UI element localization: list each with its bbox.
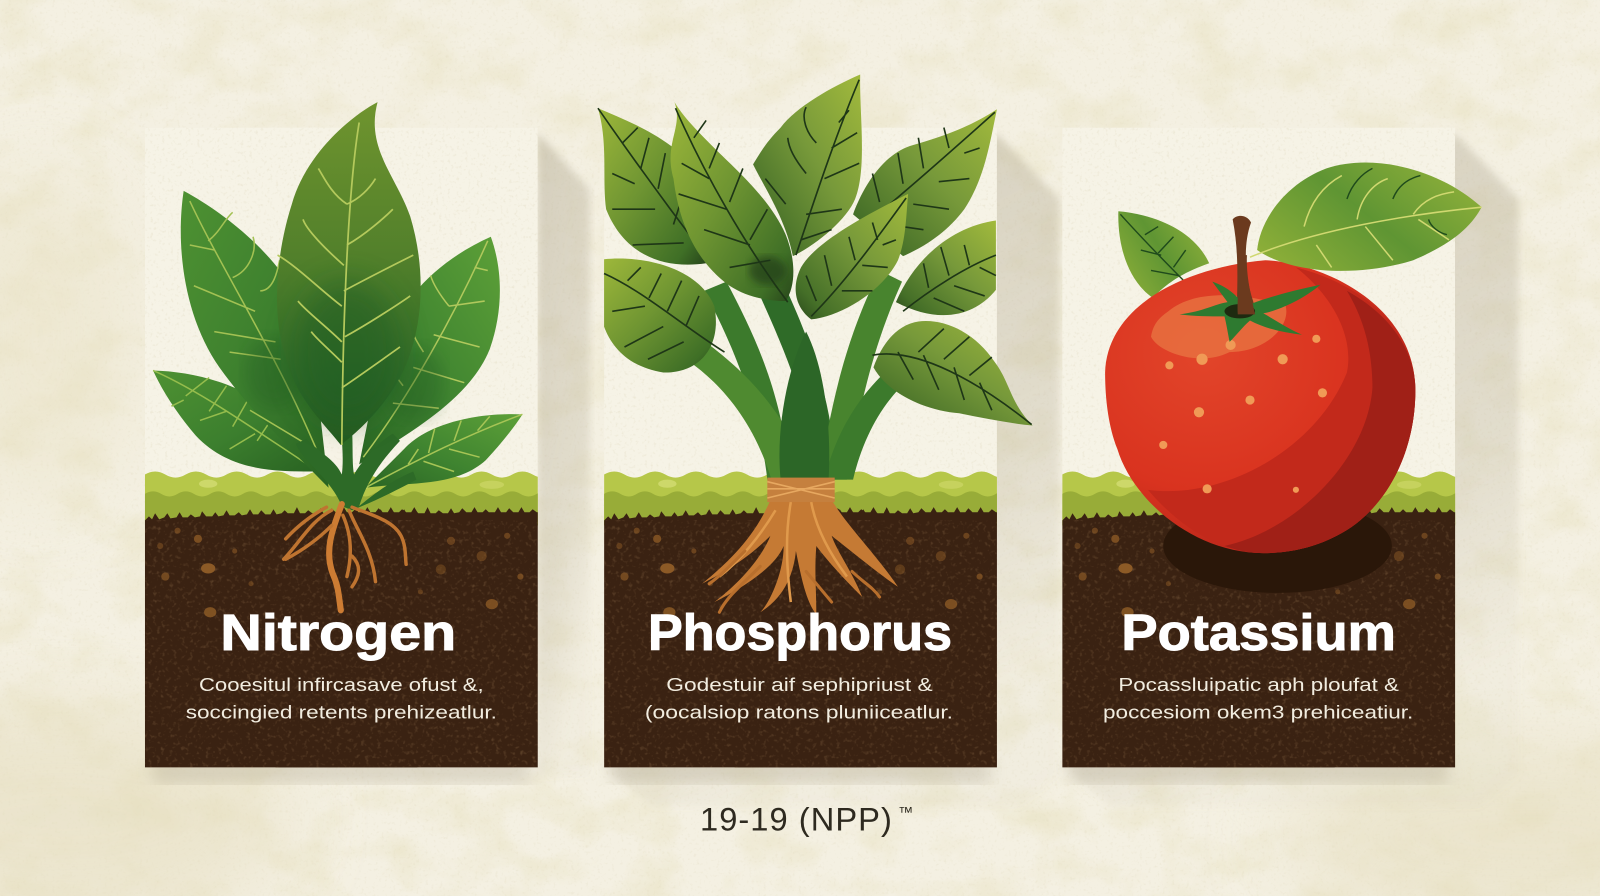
nitrogen card background xyxy=(145,128,553,781)
description: potassium xyxy=(1103,674,1413,722)
tomato body xyxy=(1105,260,1415,553)
right top leaf xyxy=(853,109,997,256)
stems xyxy=(661,263,927,480)
roots xyxy=(702,500,898,614)
roots xyxy=(284,504,406,610)
stems xyxy=(296,429,416,510)
lower left leaf xyxy=(153,370,318,471)
left back leaf xyxy=(181,191,329,488)
potassium card background xyxy=(1062,128,1470,781)
left centre leaf xyxy=(671,102,793,302)
lower right leaf xyxy=(365,414,522,488)
title: phosphorus: Phosphorus xyxy=(648,604,952,661)
description: phosphorus: Godestuir aif sephipriust & xyxy=(666,674,933,695)
phosphorus card background xyxy=(604,128,1012,781)
tomato spots xyxy=(1159,335,1327,493)
tomato highlight xyxy=(1151,295,1286,358)
right middle leaf xyxy=(896,220,996,315)
center leaf xyxy=(277,102,421,445)
icon: tomato with leaves xyxy=(1105,163,1482,593)
tomato mid shading xyxy=(1148,267,1415,553)
calyx xyxy=(1180,282,1320,342)
description: phosphorus: (oocalsiop ratons pluniiceatlur. xyxy=(645,701,953,722)
description: potassium: Pocassluipatic aph ploufat & xyxy=(1118,674,1399,695)
description: phosphorus xyxy=(645,674,953,722)
left lower leaf xyxy=(604,258,724,373)
description: nitrogen xyxy=(186,674,497,722)
footer label: ™ xyxy=(898,804,913,821)
centre front leaf xyxy=(796,194,908,319)
stem xyxy=(1233,216,1257,318)
title: potassium: Potassium xyxy=(1121,604,1396,661)
lower right leaf xyxy=(872,321,1033,426)
tomato ground shadow xyxy=(1163,499,1392,593)
panel: phosphorus xyxy=(598,75,1033,781)
icon: nitrogen plant xyxy=(153,102,522,610)
description: nitrogen: Cooesitul infircasave ofust &, xyxy=(199,674,484,695)
calyx centre xyxy=(1224,304,1255,318)
stem front xyxy=(1238,255,1255,314)
title: nitrogen: Nitrogen xyxy=(220,604,456,661)
tomato dark shading xyxy=(1224,291,1415,553)
long shadows behind cards xyxy=(153,133,1518,806)
large leaf xyxy=(1250,163,1482,271)
icon: phosphorus plant xyxy=(598,75,1033,614)
far left leaf xyxy=(598,108,714,267)
description: nitrogen: soccingied retents prehizeatlur. xyxy=(186,701,497,722)
twine bundle xyxy=(767,478,835,502)
right back leaf xyxy=(359,237,500,464)
description: potassium: poccesiom okem3 prehiceatiur. xyxy=(1103,701,1413,722)
footer label: 19-19 (NPP) xyxy=(700,801,892,838)
panel: nitrogen xyxy=(145,102,553,781)
small leaf xyxy=(1118,211,1209,298)
top centre leaf xyxy=(753,75,862,256)
panel: potassium xyxy=(1062,128,1482,781)
